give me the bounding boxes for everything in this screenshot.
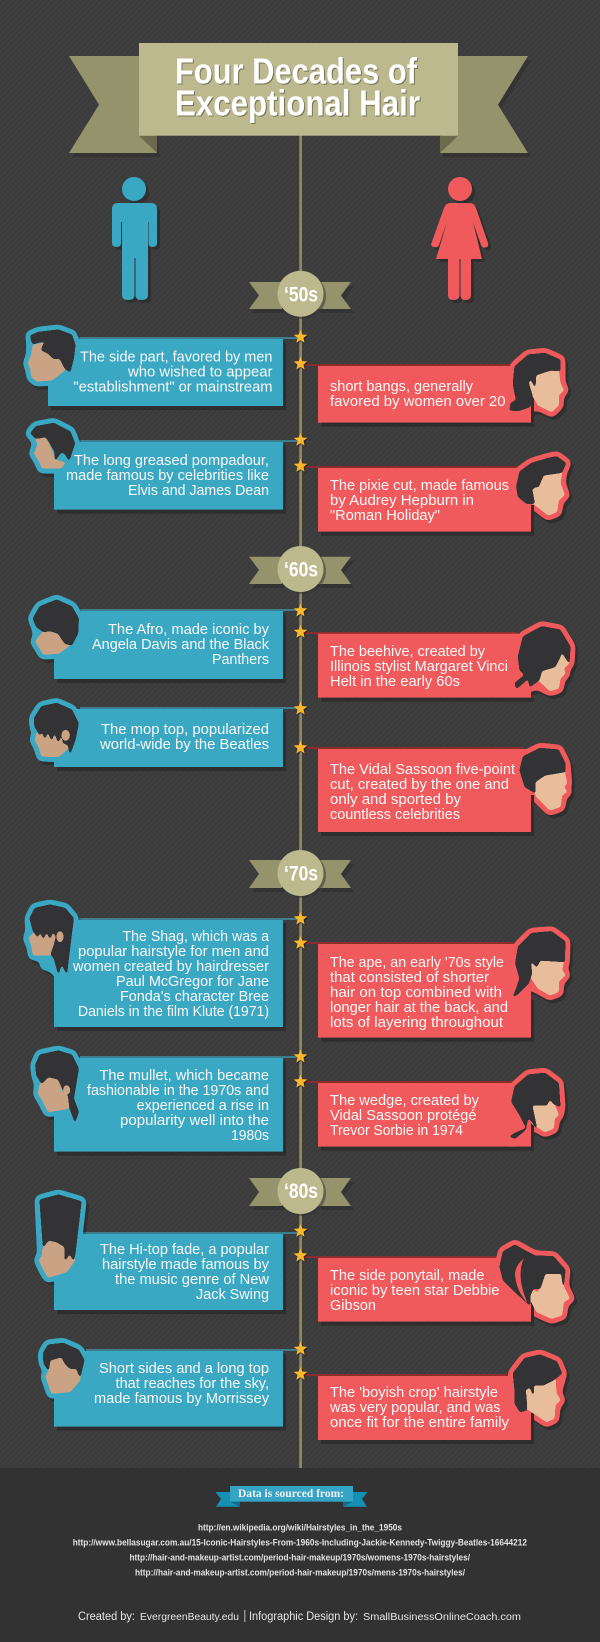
text xyxy=(87,1068,269,1144)
text xyxy=(92,622,270,668)
source links: http://www.bellasugar.com.au/15-Iconic-Hairstyles-From-1960s-Including-Jackie-Kennedy-Twiggy-Beatles-16644212 xyxy=(73,1538,527,1548)
text: hairstyle made famous by xyxy=(102,1257,270,1273)
credits: Created by: xyxy=(78,1611,135,1623)
text: The Vidal Sassoon five-point xyxy=(330,762,515,778)
text xyxy=(330,478,509,524)
source links xyxy=(73,1522,527,1578)
text: The wedge, created by xyxy=(330,1093,480,1109)
title xyxy=(175,50,420,124)
head outline xyxy=(28,905,73,973)
icon: star xyxy=(294,625,307,638)
text: The Hi-top fade, a popular xyxy=(100,1242,269,1258)
icon: star xyxy=(294,459,307,472)
text: countless celebrities xyxy=(330,807,460,823)
text: iconic by teen star Debbie xyxy=(330,1283,500,1299)
head outline xyxy=(39,1195,81,1277)
text: The Afro, made iconic by xyxy=(108,622,270,638)
text: the music genre of New xyxy=(115,1272,270,1288)
text: The beehive, created by xyxy=(330,644,486,660)
text xyxy=(66,453,269,499)
text: Daniels in the film Klute (1971) xyxy=(78,1004,269,1020)
icon: man xyxy=(112,177,157,300)
panel: short sides long top xyxy=(43,1342,307,1431)
text xyxy=(330,762,515,823)
text: women created by hairdresser xyxy=(72,959,269,975)
text: Gibson xyxy=(330,1298,376,1314)
icon: star xyxy=(294,357,307,369)
credits: Infographic Design by: xyxy=(249,1611,358,1623)
text: fashionable in the 1970s and xyxy=(87,1083,269,1099)
text xyxy=(330,1093,480,1139)
icon: star xyxy=(294,1249,307,1261)
head outline xyxy=(515,627,570,691)
title banner xyxy=(69,43,528,153)
text: The side ponytail, made xyxy=(330,1268,484,1284)
text: Paul McGregor for Jane xyxy=(116,974,269,990)
icon: woman xyxy=(431,177,488,300)
panel: beehive xyxy=(294,625,570,702)
panel: pixie cut xyxy=(294,457,566,536)
panel: the ape xyxy=(294,932,565,1042)
badge: 50s: ‘50s xyxy=(284,284,318,307)
text: The mop top, popularized xyxy=(101,722,269,738)
head outline xyxy=(500,1245,569,1318)
panel: mullet xyxy=(36,1050,307,1156)
text xyxy=(99,722,269,753)
text: only and sported by xyxy=(330,792,462,808)
text xyxy=(330,644,508,690)
text xyxy=(330,955,508,1031)
head outline xyxy=(31,423,75,468)
text: The side part, favored by men xyxy=(80,350,272,366)
panel: footer xyxy=(0,1468,600,1642)
icon: star xyxy=(294,702,307,714)
icon: five-point head xyxy=(520,748,567,810)
text: Short sides and a long top xyxy=(99,1361,269,1377)
icon: pixie head xyxy=(517,457,566,515)
text: by Audrey Hepburn in xyxy=(330,493,474,509)
panel: short bangs xyxy=(294,353,563,427)
head outline xyxy=(510,353,563,412)
text xyxy=(330,379,506,410)
text: that consisted of shorter xyxy=(330,970,489,986)
text: world-wide by the Beatles xyxy=(99,737,269,753)
icon: star xyxy=(294,1075,307,1087)
icon: mop top head xyxy=(34,703,78,757)
badge: 70s: ‘70s xyxy=(284,863,318,886)
head outline xyxy=(513,1355,562,1422)
text: Angela Davis and the Black xyxy=(92,637,270,653)
head outline xyxy=(28,330,75,381)
text: longer hair at the back, and xyxy=(330,1000,508,1016)
icon: short bangs head xyxy=(510,353,563,412)
icon: star xyxy=(294,433,307,446)
head outline xyxy=(520,748,567,810)
title: Four Decades of xyxy=(175,50,418,92)
text: made famous by Morrissey xyxy=(94,1391,270,1407)
panel: pompadour xyxy=(31,423,307,514)
text: Fonda's character Bree xyxy=(120,989,269,1005)
text xyxy=(100,1242,270,1303)
panel: boyish crop xyxy=(294,1355,562,1444)
text: favored by women over 20 xyxy=(330,394,506,410)
text xyxy=(94,1361,270,1407)
head outline xyxy=(513,932,565,997)
icon: short sides head xyxy=(43,1343,84,1393)
head outline xyxy=(517,457,566,515)
icon: ponytail head xyxy=(500,1245,569,1318)
text: "establishment" or mainstream xyxy=(74,380,272,396)
icon: star xyxy=(294,1050,307,1062)
text: was very popular, and was xyxy=(329,1400,500,1416)
text xyxy=(72,929,270,1020)
text: Helt in the early 60s xyxy=(330,674,460,690)
icon: star xyxy=(294,912,307,924)
text: The mullet, which became xyxy=(100,1068,269,1084)
icon: star xyxy=(294,1367,307,1380)
head outline xyxy=(43,1343,84,1393)
panel: wedge xyxy=(294,1073,560,1151)
icon: star xyxy=(294,330,307,343)
panel: afro xyxy=(33,600,307,683)
icon: hi-top head xyxy=(39,1195,81,1277)
text: cut, created by the one and xyxy=(330,777,509,793)
text: "Roman Holiday" xyxy=(330,508,440,524)
text: lots of layering throughout xyxy=(330,1015,503,1031)
panel: five-point cut xyxy=(294,741,567,836)
text: popular hairstyle for men and xyxy=(78,944,269,960)
head outline xyxy=(33,600,78,654)
text: experienced a rise in xyxy=(137,1098,269,1114)
badge: 80s: ‘80s xyxy=(284,1180,318,1203)
text: once fit for the entire family xyxy=(330,1415,510,1431)
icon: star xyxy=(294,604,307,616)
text: Vidal Sassoon protégé xyxy=(330,1108,476,1124)
text: who wished to appear xyxy=(127,364,273,380)
panel: side ponytail xyxy=(294,1245,569,1326)
credits: EvergreenBeauty.edu xyxy=(140,1612,239,1623)
text: Jack Swing xyxy=(196,1287,269,1303)
head outline xyxy=(508,1073,560,1142)
text: The Shag, which was a xyxy=(122,929,270,945)
text: The 'boyish crop' hairstyle xyxy=(330,1385,498,1401)
sources ribbon: Data is sourced from: xyxy=(238,1488,344,1500)
icon: shag head xyxy=(29,905,73,973)
badge: 80s xyxy=(249,1168,351,1216)
text: Elvis and James Dean xyxy=(128,483,269,499)
text: The pixie cut, made famous xyxy=(330,478,509,494)
badge: 60s xyxy=(249,546,351,594)
icon: star xyxy=(294,741,307,753)
panel: hi-top fade xyxy=(39,1195,307,1314)
text: Illinois stylist Margaret Vinci xyxy=(330,659,508,675)
icon: mullet head xyxy=(36,1051,78,1122)
title: Exceptional Hair xyxy=(175,83,420,124)
icon: beehive head xyxy=(515,627,570,691)
source links: http://hair-and-makeup-artist.com/period-hair-makeup/1970s/mens-1970s-hairstyles/ xyxy=(135,1568,465,1578)
badge: 50s xyxy=(249,271,351,319)
text xyxy=(330,1268,500,1314)
credits: SmallBusinessOnlineCoach.com xyxy=(363,1612,521,1623)
text: that reaches for the sky, xyxy=(116,1376,269,1392)
icon: ape head xyxy=(513,932,565,997)
icon: side part head xyxy=(28,330,75,381)
icon: pompadour head xyxy=(31,423,75,468)
text: made famous by celebrities like xyxy=(66,468,269,484)
icon: star xyxy=(294,936,307,949)
badge: 70s xyxy=(249,850,351,898)
panel: mop top xyxy=(34,702,307,771)
icon: afro head xyxy=(33,600,78,654)
text: 1980s xyxy=(231,1128,269,1144)
text: Panthers xyxy=(212,652,269,668)
source links: http://hair-and-makeup-artist.com/period-hair-makeup/1970s/womens-1970s-hairstyles/ xyxy=(130,1552,470,1564)
head outline xyxy=(34,703,78,757)
source links: http://en.wikipedia.org/wiki/Hairstyles_in_the_1950s xyxy=(198,1522,402,1534)
icon: wedge head xyxy=(510,1073,560,1138)
text: popularity well into the xyxy=(120,1113,269,1129)
credits xyxy=(78,1610,521,1623)
sources ribbon xyxy=(216,1486,368,1507)
text: hair on top combined with xyxy=(330,985,502,1001)
icon: star xyxy=(294,1224,307,1237)
panel: side part xyxy=(28,330,307,410)
panel: shag xyxy=(28,905,307,1031)
text: Trevor Sorbie in 1974 xyxy=(330,1123,463,1139)
text: short bangs, generally xyxy=(330,379,474,395)
text xyxy=(329,1385,510,1431)
icon: boyish crop head xyxy=(513,1355,562,1422)
head outline xyxy=(36,1051,78,1122)
text: The long greased pompadour, xyxy=(74,453,269,469)
icon: star xyxy=(294,1342,307,1355)
text: The ape, an early '70s style xyxy=(330,955,504,971)
badge: 60s: ‘60s xyxy=(284,559,318,582)
text xyxy=(74,350,273,396)
timeline line xyxy=(299,135,302,1468)
